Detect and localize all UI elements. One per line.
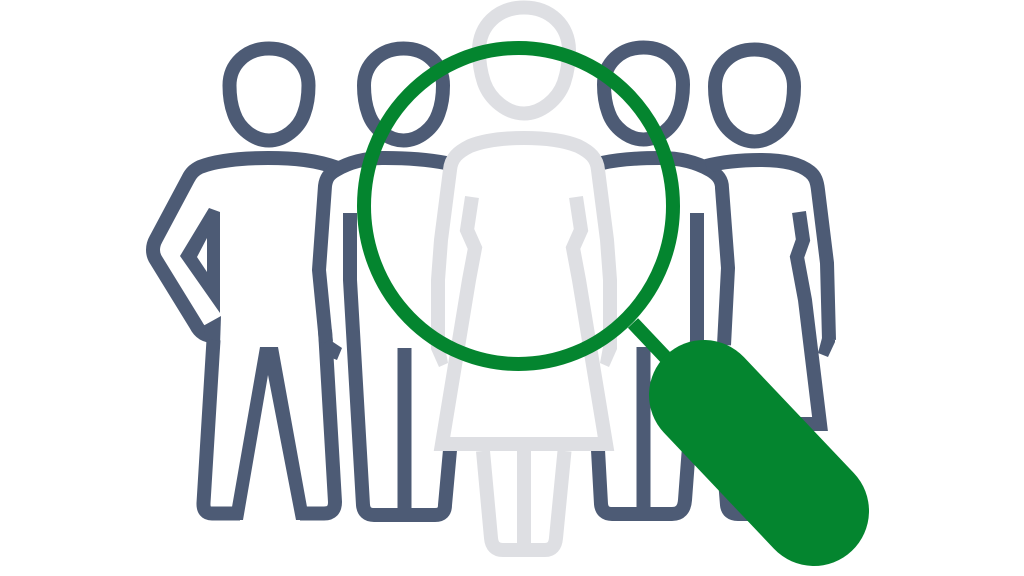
figure: second person from right <box>598 48 728 514</box>
magnifying glass neck <box>633 323 668 360</box>
magnifying glass lens ring <box>364 48 673 364</box>
icon: magnifying glass <box>364 48 814 511</box>
figure: far left person <box>153 48 338 520</box>
magnifying glass handle <box>704 395 814 511</box>
figure: central highlighted person in light grey <box>431 8 617 550</box>
figure: far right person <box>706 50 835 514</box>
figure: second person from left <box>319 48 450 515</box>
